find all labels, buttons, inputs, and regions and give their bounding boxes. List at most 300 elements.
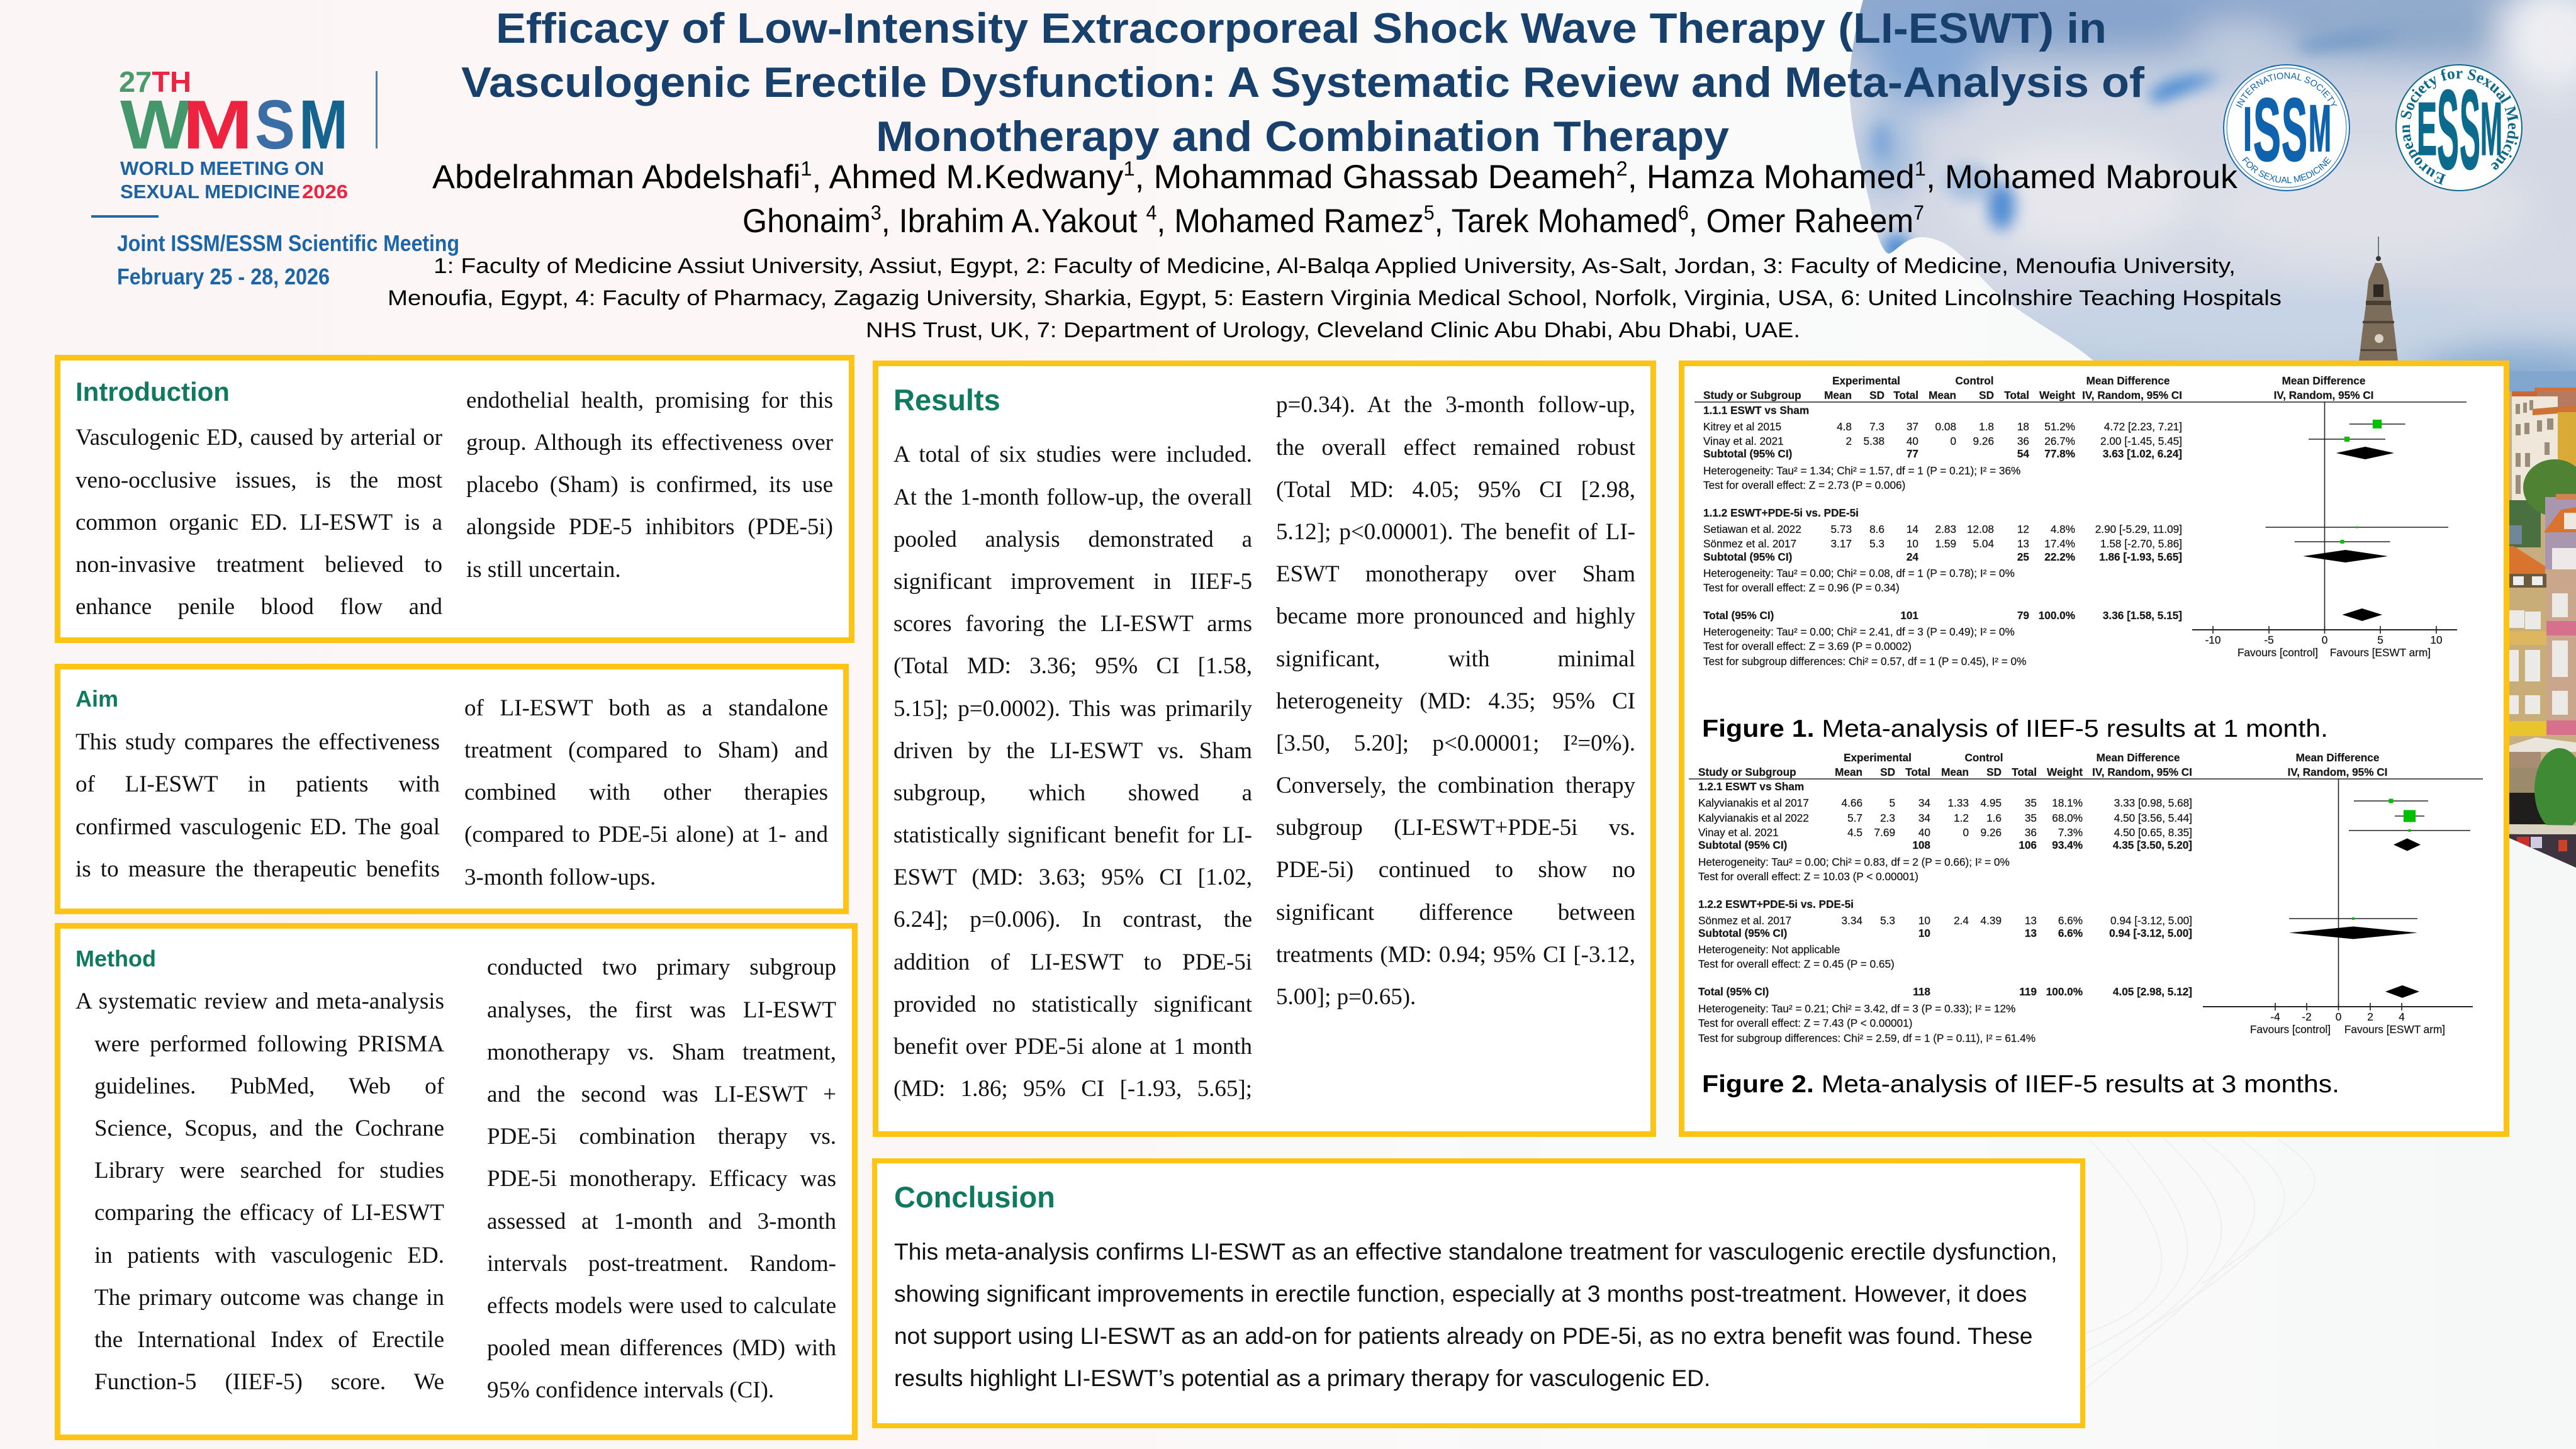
authors: 1: [1123, 157, 1135, 180]
chart: figure 1 forest plot at 1 month: 5.38: [1864, 435, 1884, 447]
chart: figure 2 forest plot at 3 months: Total (95% CI): [1698, 985, 1769, 998]
chart: figure 2 forest plot at 3 months: 1.2.2 ESWT+PDE-5i vs. PDE-5i: [1698, 898, 1854, 910]
authors: 7: [1913, 201, 1924, 224]
text: aim column 1: is to measure the therapeutic benefits: [76, 856, 440, 882]
text: results column 2: significant, with minimal: [1276, 646, 1635, 672]
chart: figure 2 forest plot at 3 months: 36: [2025, 826, 2037, 839]
logo: ISSM: S: [2282, 80, 2307, 180]
logo: WMSM: February 25 - 28, 2026: [117, 264, 330, 289]
text: method column 1: Science, Scopus, and the Cochrane: [94, 1116, 444, 1141]
chart: figure 1 forest plot at 1 month: Experimental: [1832, 374, 1900, 387]
authors: , Mohamed Mabrouk: [1926, 159, 2238, 196]
chart: figure 2 forest plot at 3 months: 34: [1918, 812, 1930, 824]
authors: 1: [800, 157, 812, 180]
logo: WMSM: M: [182, 86, 253, 164]
text: results column 1: provided no statistically significant: [893, 992, 1252, 1017]
chart: figure 2 forest plot at 3 months: 34: [1918, 797, 1930, 809]
text: results column 1: driven by the LI-ESWT vs. Sham: [893, 738, 1252, 764]
chart: figure 1 forest plot at 1 month: 2.90 [-5.29, 11.09]: [2095, 523, 2182, 535]
text: results column 1: A total of six studies were included.: [893, 442, 1252, 467]
chart: figure 2 forest plot at 3 months: 3.34: [1842, 914, 1862, 927]
chart: figure 1 forest plot at 1 month: 0: [2322, 634, 2327, 646]
chart: figure 2 forest plot at 3 months: 4.95: [1981, 797, 2002, 809]
heading: introduction: Introduction: [76, 377, 230, 406]
chart: figure 2 forest plot at 3 months: Heterogeneity: Tau² = 0.21; Chi² = 3.42, df = 3 (P = 0.33); I² = 12%: [1698, 1002, 2015, 1015]
chart: figure 2 forest plot at 3 months: 2: [2367, 1010, 2373, 1023]
chart: figure 2 forest plot at 3 months: 4.05 [2.98, 5.12]: [2113, 985, 2192, 998]
text: results column 1: benefit over PDE-5i alone at 1 month: [893, 1034, 1252, 1060]
chart: figure 2 forest plot at 3 months: 4.5: [1847, 826, 1862, 839]
chart: figure 2 forest plot at 3 months: Test for overall effect: Z = 7.43 (P < 0.00001): [1698, 1017, 1912, 1029]
chart: figure 2 forest plot at 3 months: 3.33 [0.98, 5.68]: [2114, 797, 2192, 809]
text: results column 2: heterogeneity (MD: 4.35; 95% CI: [1276, 688, 1635, 714]
chart: figure 1 forest plot at 1 month: 12: [2017, 523, 2029, 535]
panel: figures: [1679, 361, 2509, 1137]
chart: figure 1 forest plot at 1 month: 4.8: [1837, 420, 1852, 433]
text: results column 1: pooled analysis demonstrated a: [893, 527, 1252, 552]
affiliations: 1: Faculty of Medicine Assiut University, Assiut, Egypt, 2: Faculty of Medicine, Al-Balqa Applied University, As-Salt, Jordan, 3: Faculty of Medicine, Menoufia University,: [434, 254, 2236, 278]
chart: figure 1 forest plot at 1 month: Mean Difference: [2282, 374, 2365, 387]
chart: figure 1 forest plot at 1 month: Mean: [1824, 389, 1852, 401]
authors: Ghonaim: [742, 203, 878, 240]
chart: figure 1 forest plot at 1 month: 0: [1950, 435, 1956, 447]
chart: figure 1 forest plot at 1 month: 26.7%: [2044, 435, 2075, 447]
text: aim column 1: of LI-ESWT in patients with: [76, 771, 440, 797]
chart: figure 2 forest plot at 3 months: 0.94 [-3.12, 5.00]: [2109, 927, 2192, 939]
text: aim column 1: This study compares the effectiveness: [76, 729, 440, 755]
text: method column 2: intervals post-treatment. Random-: [487, 1251, 836, 1277]
chart: figure 2 forest plot at 3 months: 7.69: [1874, 826, 1895, 839]
heading: method: Method: [76, 945, 156, 971]
text: conclusion body: not support using LI-ESWT as an add-on for patients already on PDE-5i, as no extra benefit was found. These: [894, 1323, 2032, 1349]
chart: figure 1 forest plot at 1 month: Favours [control]: [2237, 646, 2318, 659]
chart: figure 1 forest plot at 1 month: Setiawan et al. 2022: [1703, 523, 1801, 535]
chart: figure 2 forest plot at 3 months: Sönmez et al. 2017: [1698, 914, 1791, 927]
panel: introduction: [55, 355, 854, 643]
chart: figure 1 forest plot at 1 month: 1.1.1 ESWT vs Sham: [1703, 404, 1809, 417]
chart: figure 2 forest plot at 3 months: 0.94 [-3.12, 5.00]: [2110, 914, 2192, 927]
text: results column 2: [3.50, 5.20]; p<0.00001; I²=0%).: [1276, 730, 1635, 756]
chart: figure 1 forest plot at 1 month: 1.8: [1979, 420, 1994, 433]
chart: figure 2 forest plot at 3 months: 108: [1912, 839, 1930, 851]
caption: figure 2: Figure 2. Meta-analysis of IIEF-5 results at 3 months.: [1702, 1071, 2339, 1098]
text: method column 1: A systematic review and meta-analysis: [76, 988, 444, 1014]
text: results column 2: (Total MD: 4.05; 95% CI [2.98,: [1276, 477, 1635, 503]
chart: figure 1 forest plot at 1 month: SD: [1869, 389, 1884, 401]
chart: figure 1 forest plot at 1 month: 12.08: [1967, 523, 1994, 535]
chart: figure 1 forest plot at 1 month: 0.08: [1935, 420, 1956, 433]
city buildings: [2508, 371, 2576, 881]
chart: figure 1 forest plot at 1 month: Subtotal (95% CI): [1703, 551, 1792, 563]
text: aim column 2: (compared to PDE-5i alone) at 1- and: [464, 822, 828, 848]
chart: figure 2 forest plot at 3 months: 10: [1918, 914, 1930, 927]
chart: figure 2 forest plot at 3 months: Test for overall effect: Z = 10.03 (P < 0.00001): [1698, 870, 1918, 883]
text: method column 2: PDE-5i monotherapy. Efficacy was: [487, 1166, 836, 1192]
text: introduction column 1: enhance penile blood flow and: [76, 594, 442, 620]
chart: figure 2 forest plot at 3 months: 4.39: [1981, 914, 2002, 927]
logo: ISSM: [2223, 64, 2350, 191]
chart: figure 2 forest plot at 3 months: Total: [1905, 766, 1930, 778]
text: aim column 2: treatment (compared to Sham) and: [464, 737, 828, 763]
chart: figure 1 forest plot at 1 month: Mean: [1929, 389, 1956, 401]
text: results column 2: ESWT monotherapy over Sham: [1276, 561, 1635, 587]
text: results column 1: subgroup, which showed a: [893, 780, 1252, 806]
logo: ESSM: European Society for Sexual Medicine: [2401, 69, 2519, 185]
chart: figure 1 forest plot at 1 month: Test for overall effect: Z = 3.69 (P = 0.0002): [1703, 640, 1912, 652]
authors: , Mohammad Ghassab Deameh: [1135, 159, 1616, 196]
chart: figure 1 forest plot at 1 month: 2: [1845, 435, 1852, 447]
chart: figure 1 forest plot at 1 month: Control: [1955, 374, 1994, 387]
logo: ESSM: S: [2460, 67, 2480, 193]
text: results column 1: (MD: 1.86; 95% CI [-1.93, 5.65];: [893, 1076, 1252, 1102]
text: aim column 2: of LI-ESWT both as a standalone: [464, 695, 828, 721]
panel: method: [55, 923, 858, 1440]
logo: ESSM: E: [2417, 87, 2437, 171]
chart: figure 2 forest plot at 3 months: SD: [1880, 766, 1895, 778]
text: method column 2: conducted two primary subgroup: [487, 954, 836, 980]
chart: figure 1 forest plot at 1 month: 79: [2017, 609, 2029, 622]
chart: figure 2 forest plot at 3 months: 4.66: [1842, 797, 1862, 809]
title: Monotherapy and Combination Therapy: [876, 113, 1729, 160]
logo: ISSM: M: [2309, 92, 2331, 165]
affiliations: Menoufia, Egypt, 4: Faculty of Pharmacy, Zagazig University, Sharkia, Egypt, 5: Eastern Virginia Medical School, Norfolk, Virginia, USA, 6: United Lincolnshire Teaching Hospitals: [388, 286, 2282, 310]
chart: figure 1 forest plot at 1 month: Kitrey et al 2015: [1703, 420, 1781, 433]
chart: figure 2 forest plot at 3 months: -4: [2270, 1010, 2280, 1023]
logo: ISSM: S: [2253, 80, 2281, 180]
chart: figure 1 forest plot at 1 month: 3.17: [1831, 537, 1852, 550]
chart: figure 1 forest plot at 1 month: 3.36 [1.58, 5.15]: [2103, 609, 2182, 622]
chart: figure 1 forest plot at 1 month: 22.2%: [2044, 551, 2075, 563]
logo: WMSM: 2026: [302, 181, 348, 203]
chart: figure 1 forest plot at 1 month: Weight: [2039, 389, 2075, 401]
background with sky and city photo: [1849, 0, 2576, 1389]
text: method column 1: were performed following PRISMA: [94, 1031, 444, 1057]
text: method column 1: the International Index of Erectile: [94, 1327, 444, 1353]
chart: figure 1 forest plot at 1 month: Total: [1893, 389, 1918, 401]
affiliations: NHS Trust, UK, 7: Department of Urology, Cleveland Clinic Abu Dhabi, Abu Dhabi, UAE.: [866, 318, 1800, 342]
chart: figure 2 forest plot at 3 months: 7.3%: [2058, 826, 2083, 839]
text: introduction column 1: non-invasive treatment believed to: [76, 552, 442, 578]
chart: figure 2 forest plot at 3 months: Weight: [2047, 766, 2083, 778]
text: results column 2: 5.12]; p<0.00001). The benefit of LI-: [1276, 519, 1635, 545]
chart: figure 2 forest plot at 3 months: 13: [2025, 914, 2037, 927]
text: results column 2: significant difference between: [1276, 900, 1635, 926]
chart: figure 1 forest plot at 1 month: 36: [2017, 435, 2029, 447]
text: results column 2: treatments (MD: 0.94; 95% CI [-3.12,: [1276, 942, 1635, 968]
chart: figure 1 forest plot at 1 month: 9.26: [1973, 435, 1994, 447]
logo: WMSM: M: [299, 86, 348, 164]
chart: figure 1 forest plot at 1 month: 5.73: [1831, 523, 1852, 535]
chart: figure 1 forest plot at 1 month: 3.63 [1.02, 6.24]: [2103, 447, 2182, 460]
panel: conclusion: [872, 1158, 2085, 1428]
text: aim column 1: [76, 729, 440, 882]
chart: figure 2 forest plot at 3 months: Mean: [1835, 766, 1862, 778]
text: introduction column 2: is still uncertain.: [466, 557, 621, 583]
chart: figure 2 forest plot at 3 months: 1.2: [1954, 812, 1969, 824]
chart: figure 2 forest plot at 3 months: 5.7: [1847, 812, 1862, 824]
chart: figure 1 forest plot at 1 month: 2.83: [1935, 523, 1956, 535]
chart: figure 1 forest plot at 1 month: Favours [ESWT arm]: [2330, 646, 2431, 659]
authors: , Ahmed M.Kedwany: [812, 159, 1124, 196]
chart: figure 2 forest plot at 3 months: 119: [2019, 985, 2037, 998]
logo: ISSM: I: [2243, 94, 2252, 164]
text: method column 2: and the second was LI-ESWT +: [487, 1082, 836, 1107]
text: introduction column 2: placebo (Sham) is confirmed, its use: [466, 472, 833, 498]
chart: figure 2 forest plot at 3 months: Mean: [1941, 766, 1969, 778]
authors: , Tarek Mohamed: [1435, 203, 1678, 240]
chart: figure 2 forest plot at 3 months: -2: [2302, 1010, 2312, 1023]
chart: figure 1 forest plot at 1 month: Sönmez et al. 2017: [1703, 537, 1796, 550]
chart: figure 1 forest plot at 1 month: 5.04: [1973, 537, 1994, 550]
text: method column 2: assessed at 1-month and 3-month: [487, 1209, 836, 1234]
chart: figure 2 forest plot at 3 months: Mean Difference: [2097, 751, 2180, 764]
header: logo, title, authors and affiliations: [91, 4, 2523, 342]
chart: figure 1 forest plot at 1 month: 101: [1900, 609, 1918, 622]
chart: figure 2 forest plot at 3 months: Total: [2012, 766, 2037, 778]
text: results column 1: scores favoring the LI-ESWT arms: [893, 611, 1252, 637]
chart: figure 2 forest plot at 3 months: 5.3: [1880, 914, 1895, 927]
chart: figure 2 forest plot at 3 months: 100.0%: [2046, 985, 2083, 998]
chart: figure 2 forest plot at 3 months: IV, Random, 95% CI: [2288, 766, 2387, 778]
chart: figure 1 forest plot at 1 month: 25: [2017, 551, 2029, 563]
chart: figure 2 forest plot at 3 months: 4: [2399, 1010, 2405, 1023]
chart: figure 1 forest plot at 1 month: Total (95% CI): [1703, 609, 1774, 622]
text: introduction column 1: veno-occlusive issues, is the most: [76, 467, 442, 493]
logo: ISSM: FOR SEXUAL MEDICINE: [2242, 156, 2332, 184]
chart: figure 2 forest plot at 3 months: 1.2.1 ESWT vs Sham: [1698, 780, 1804, 793]
authors: , Hamza Mohamed: [1628, 159, 1915, 196]
chart: figure 1 forest plot at 1 month: 14: [1907, 523, 1918, 535]
chart: figure 2 forest plot at 3 months: 5: [1889, 797, 1895, 809]
chart: figure 1 forest plot at 1 month: Total: [2004, 389, 2029, 401]
chart: figure 1 forest plot at 1 month: Vinay et al. 2021: [1703, 435, 1784, 447]
authors: 3: [871, 201, 882, 224]
chart: figure 1 forest plot at 1 month: IV, Random, 95% CI: [2082, 389, 2182, 401]
chart: figure 2 forest plot at 3 months: 10: [1918, 927, 1930, 939]
text: introduction column 2: alongside PDE-5 inhibitors (PDE-5i): [466, 514, 833, 540]
authors: , Omer Raheem: [1689, 203, 1913, 240]
text: conclusion body: results highlight LI-ESWT’s potential as a primary therapy for vasculogenic ED.: [894, 1365, 1710, 1391]
logo: ESSM: S: [2437, 67, 2459, 193]
text: introduction column 1: common organic ED. LI-ESWT is a: [76, 510, 442, 535]
affiliations: [388, 254, 2282, 342]
text: method column 2: monotherapy vs. Sham treatment,: [487, 1039, 836, 1065]
chart: figure 2 forest plot at 3 months: 68.0%: [2052, 812, 2083, 824]
chart: figure 1 forest plot at 1 month: 8.6: [1869, 523, 1884, 535]
text: conclusion body: This meta-analysis confirms LI-ESWT as an effective standalone treatment for vasculogenic erectile dysfunction,: [894, 1238, 2058, 1265]
heading: conclusion: Conclusion: [894, 1180, 1055, 1214]
chart: figure 1 forest plot at 1 month: 54: [2017, 447, 2029, 460]
title: Efficacy of Low-Intensity Extracorporeal Shock Wave Therapy (LI-ESWT) in: [496, 4, 2107, 52]
chart: figure 2 forest plot at 3 months: Study or Subgroup: [1698, 766, 1796, 778]
chart: figure 1 forest plot at 1 month: -10: [2205, 634, 2220, 646]
text: method column 2: 95% confidence intervals (CI).: [487, 1377, 774, 1403]
logo: WMSM: 27TH: [119, 65, 191, 98]
chart: figure 1 forest plot at 1 month: IV, Random, 95% CI: [2274, 389, 2373, 401]
text: results column 2: [1276, 392, 1635, 1010]
text: results column 1: 6.24]; p=0.006). In contrast, the: [893, 907, 1252, 932]
chart: figure 1 forest plot at 1 month: [1694, 374, 2467, 668]
chart: figure 2 forest plot at 3 months: 1.6: [1986, 812, 2002, 824]
text: method column 2: [487, 954, 836, 1403]
text: results column 1: (Total MD: 3.36; 95% CI [1.58,: [893, 653, 1252, 679]
chart: figure 2 forest plot at 3 months: Favours [control]: [2250, 1023, 2331, 1036]
chart: figure 1 forest plot at 1 month: Mean Difference: [2086, 374, 2170, 387]
chart: figure 2 forest plot at 3 months: 4.50 [3.56, 5.44]: [2114, 812, 2192, 824]
chart: figure 1 forest plot at 1 month: 5.3: [1869, 537, 1884, 550]
chart: figure 1 forest plot at 1 month: 1.58 [-2.70, 5.86]: [2100, 537, 2182, 550]
chart: figure 1 forest plot at 1 month: 18: [2017, 420, 2029, 433]
chart: figure 2 forest plot at 3 months: 93.4%: [2052, 839, 2083, 851]
text: method column 2: PDE-5i combination therapy vs.: [487, 1124, 836, 1150]
chart: figure 2 forest plot at 3 months: Experimental: [1844, 751, 1912, 764]
text: method column 1: The primary outcome was change in: [94, 1285, 444, 1311]
panel: aim: [55, 664, 849, 914]
chart: figure 1 forest plot at 1 month: 77: [1907, 447, 1918, 460]
chart: figure 2 forest plot at 3 months: 106: [2019, 839, 2037, 851]
chart: figure 2 forest plot at 3 months: Favours [ESWT arm]: [2344, 1023, 2445, 1036]
chart: figure 2 forest plot at 3 months: SD: [1986, 766, 2002, 778]
chart: figure 2 forest plot at 3 months: 2.3: [1880, 812, 1895, 824]
chart: figure 1 forest plot at 1 month: 100.0%: [2039, 609, 2075, 622]
chart: figure 2 forest plot at 3 months: 2.4: [1954, 914, 1969, 927]
chart: figure 2 forest plot at 3 months: [1689, 751, 2483, 1044]
logo: WMSM: [91, 65, 459, 289]
authors: , Ibrahim A.Yakout: [882, 203, 1146, 240]
chart: figure 2 forest plot at 3 months: IV, Random, 95% CI: [2092, 766, 2192, 778]
chart: figure 2 forest plot at 3 months: 35: [2025, 797, 2037, 809]
chart: figure 2 forest plot at 3 months: Heterogeneity: Not applicable: [1698, 943, 1840, 956]
chart: figure 1 forest plot at 1 month: Test for subgroup differences: Chi² = 0.57, df = 1 (P = 0.45), I² = 0%: [1703, 655, 2026, 668]
chart: figure 2 forest plot at 3 months: 118: [1913, 985, 1930, 998]
chart: figure 2 forest plot at 3 months: 4.35 [3.50, 5.20]: [2113, 839, 2192, 851]
text: method column 1: Function-5 (IIEF-5) score. We: [94, 1369, 444, 1395]
chart: figure 1 forest plot at 1 month: Study or Subgroup: [1703, 389, 1801, 401]
text: results column 2: 5.00]; p=0.65).: [1276, 984, 1416, 1010]
text: introduction column 2: [466, 388, 833, 583]
chart: figure 2 forest plot at 3 months: 4.50 [0.65, 8.35]: [2114, 826, 2192, 839]
text: results column 1: statistically significant benefit for LI-: [893, 822, 1252, 848]
chart: figure 1 forest plot at 1 month: 5: [2377, 634, 2383, 646]
text: aim column 2: 3-month follow-ups.: [464, 864, 656, 890]
chart: figure 1 forest plot at 1 month: 1.86 [-1.93, 5.65]: [2099, 551, 2182, 563]
chart: figure 1 forest plot at 1 month: 2.00 [-1.45, 5.45]: [2100, 435, 2182, 447]
authors: , Mohamed Ramez: [1156, 203, 1424, 240]
chart: figure 2 forest plot at 3 months: 9.26: [1981, 826, 2002, 839]
title: Vasculogenic Erectile Dysfunction: A Systematic Review and Meta-Analysis of: [461, 59, 2144, 106]
chart: figure 1 forest plot at 1 month: 17.4%: [2044, 537, 2075, 550]
text: results column 2: the overall effect remained robust: [1276, 435, 1635, 461]
text: method column 1: [76, 988, 444, 1395]
chart: figure 1 forest plot at 1 month: 7.3: [1869, 420, 1884, 433]
chart: figure 2 forest plot at 3 months: Mean Difference: [2296, 751, 2379, 764]
chart: figure 2 forest plot at 3 months: 35: [2025, 812, 2037, 824]
text: results column 2: became more pronounced and highly: [1276, 603, 1635, 629]
chart: figure 1 forest plot at 1 month: 37: [1907, 420, 1918, 433]
authors: 6: [1678, 201, 1689, 224]
title: [461, 4, 2144, 160]
chart: figure 1 forest plot at 1 month: Heterogeneity: Tau² = 1.34; Chi² = 1.57, df = 1 (P = 0.21); I² = 36%: [1703, 464, 2020, 477]
text: results column 1: At the 1-month follow-up, the overall: [893, 484, 1252, 510]
chart: figure 2 forest plot at 3 months: Kalyvianakis et al 2017: [1698, 797, 1809, 809]
text: aim column 1: confirmed vasculogenic ED. The goal: [76, 814, 440, 840]
chart: figure 1 forest plot at 1 month: Heterogeneity: Tau² = 0.00; Chi² = 0.08, df = 1 (P = 0.78); I² = 0%: [1703, 567, 2015, 579]
chart: figure 1 forest plot at 1 month: Test for overall effect: Z = 0.96 (P = 0.34): [1703, 581, 1900, 594]
chart: figure 2 forest plot at 3 months: Control: [1964, 751, 2003, 764]
authors: 5: [1424, 201, 1435, 224]
chart: figure 2 forest plot at 3 months: Subtotal (95% CI): [1698, 927, 1787, 939]
text: method column 1: comparing the efficacy of LI-ESWT: [94, 1200, 444, 1226]
authors: 4: [1146, 201, 1156, 224]
chart: figure 2 forest plot at 3 months: 13: [2025, 927, 2037, 939]
text: introduction column 1: [76, 425, 442, 620]
chart: figure 1 forest plot at 1 month: 13: [2017, 537, 2029, 550]
chart: figure 2 forest plot at 3 months: 18.1%: [2052, 797, 2083, 809]
chart: figure 2 forest plot at 3 months: Vinay et al. 2021: [1698, 826, 1779, 839]
text: results column 2: PDE-5i) continued to show no: [1276, 857, 1635, 883]
logo: WMSM: SEXUAL MEDICINE: [120, 181, 300, 203]
chart: figure 2 forest plot at 3 months: 1.33: [1948, 797, 1969, 809]
text: results column 2: Conversely, the combination therapy: [1276, 773, 1635, 798]
chart: figure 2 forest plot at 3 months: 40: [1918, 826, 1930, 839]
chart: figure 1 forest plot at 1 month: -5: [2264, 634, 2274, 646]
text: results column 2: p=0.34). At the 3-month follow-up,: [1276, 392, 1635, 418]
text: results column 1: 5.15]; p=0.0002). This was primarily: [893, 696, 1252, 722]
chart: figure 2 forest plot at 3 months: Subtotal (95% CI): [1698, 839, 1787, 851]
text: method column 1: Library were searched for studies: [94, 1158, 444, 1183]
text: results column 1: significant improvement in IIEF-5: [893, 569, 1252, 595]
chart: figure 2 forest plot at 3 months: Kalyvianakis et al 2022: [1698, 812, 1809, 824]
logo: WMSM: W: [120, 86, 191, 164]
text: results column 1: [893, 442, 1252, 1102]
chart: figure 1 forest plot at 1 month: 10: [2430, 634, 2443, 646]
chart: figure 1 forest plot at 1 month: Test for overall effect: Z = 2.73 (P = 0.006): [1703, 479, 1905, 491]
chart: figure 1 forest plot at 1 month: 1.1.2 ESWT+PDE-5i vs. PDE-5i: [1703, 506, 1859, 519]
text: method column 1: guidelines. PubMed, Web of: [94, 1073, 444, 1099]
chart: figure 2 forest plot at 3 months: 0: [2336, 1010, 2341, 1023]
chart: figure 1 forest plot at 1 month: 10: [1907, 537, 1918, 550]
text: introduction column 1: Vasculogenic ED, caused by arterial or: [76, 425, 442, 450]
logo: WMSM: S: [255, 86, 295, 164]
logo: ISSM: INTERNATIONAL SOCIETY: [2236, 72, 2338, 108]
logo: WMSM: Joint ISSM/ESSM Scientific Meeting: [117, 230, 459, 256]
chart: figure 1 forest plot at 1 month: Heterogeneity: Tau² = 0.00; Chi² = 2.41, df = 3 (P = 0.49); I² = 0%: [1703, 625, 2015, 638]
authors: [432, 157, 2238, 240]
text: conclusion body: showing significant improvements in erectile function, especially at 3 months post-treatment. However, it does: [894, 1280, 2027, 1307]
authors: 2: [1616, 157, 1628, 180]
chart: figure 1 forest plot at 1 month: 1.59: [1935, 537, 1956, 550]
chart: figure 1 forest plot at 1 month: 4.8%: [2051, 523, 2075, 535]
chart: figure 1 forest plot at 1 month: 40: [1907, 435, 1918, 447]
text: results column 1: addition of LI-ESWT to PDE-5i: [893, 949, 1252, 975]
chart: figure 1 forest plot at 1 month: 51.2%: [2044, 420, 2075, 433]
chart: figure 2 forest plot at 3 months: Heterogeneity: Tau² = 0.00; Chi² = 0.83, df = 2 (P = 0.66); I² = 0%: [1698, 856, 2010, 868]
authors: 1: [1915, 157, 1926, 180]
chart: figure 2 forest plot at 3 months: 6.6%: [2058, 927, 2083, 939]
logo: ESSM: M: [2480, 87, 2502, 171]
heading: aim: Aim: [76, 686, 118, 711]
text: results column 2: subgroup (LI-ESWT+PDE-5i vs.: [1276, 815, 1635, 841]
text: method column 2: effects models were used to calculate: [487, 1293, 836, 1319]
text: aim column 2: [464, 695, 828, 890]
chart: figure 2 forest plot at 3 months: 6.6%: [2058, 914, 2083, 927]
caption: figure 1: Figure 1. Meta-analysis of IIEF-5 results at 1 month.: [1702, 715, 2328, 742]
text: results column 1: ESWT (MD: 3.63; 95% CI [1.02,: [893, 864, 1252, 890]
text: conclusion body: [894, 1238, 2058, 1391]
heading: results: Results: [893, 383, 1000, 417]
chart: figure 2 forest plot at 3 months: Test for overall effect: Z = 0.45 (P = 0.65): [1698, 958, 1895, 970]
text: introduction column 2: group. Although its effectiveness over: [466, 430, 833, 456]
